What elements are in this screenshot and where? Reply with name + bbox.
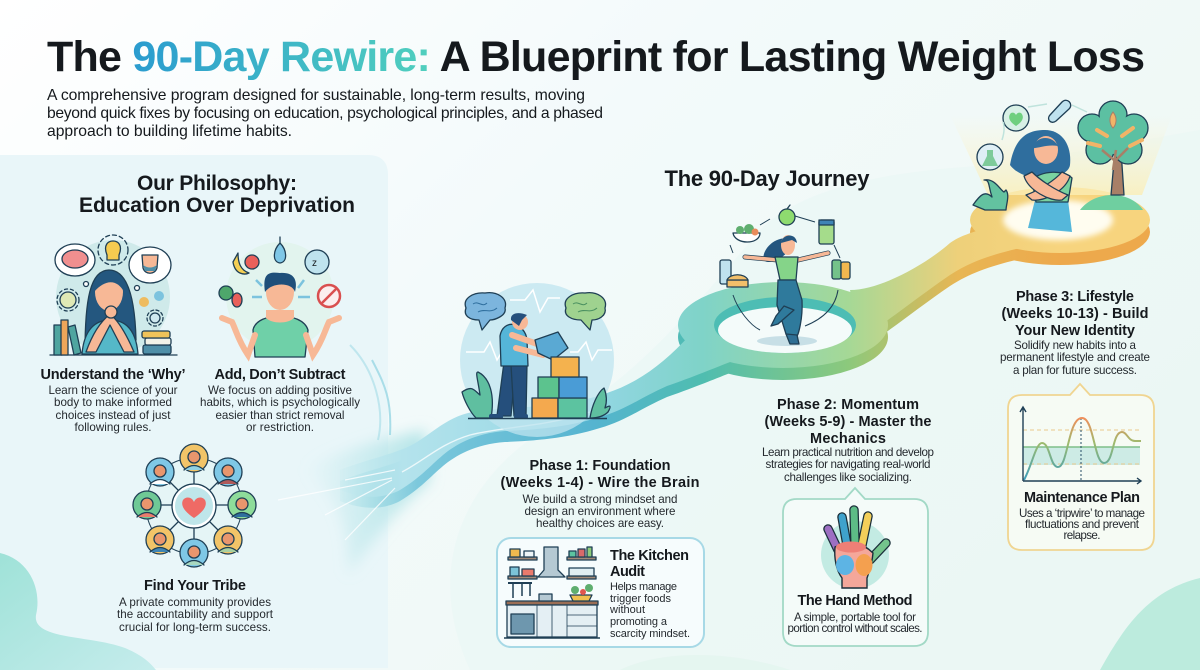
text: add, don't subtract <box>200 367 360 434</box>
card: the kitchen audit: without <box>609 604 645 616</box>
text: understand the why: Understand the ‘Why’ <box>40 367 186 383</box>
card: the kitchen audit <box>497 538 704 647</box>
icon: man balancing healthy habits <box>219 237 340 357</box>
card: the kitchen audit: Audit <box>610 564 645 580</box>
text: find your tribe: A private community provides <box>119 596 271 609</box>
ribbon tail white strands <box>278 470 395 540</box>
text: understand the why: choices instead of just <box>56 409 171 422</box>
text: phase 1: healthy choices are easy. <box>536 517 664 530</box>
text: find your tribe: the accountability and support <box>117 608 274 621</box>
text: phase 1 <box>500 458 700 530</box>
heading: the 90-day journey: The 90-Day Journey <box>664 166 870 191</box>
panel: philosophy background <box>0 155 388 668</box>
icon: colour-coded hand <box>821 510 889 589</box>
card: the kitchen audit: Helps manage <box>610 581 677 593</box>
card: the kitchen audit: trigger foods <box>610 593 672 605</box>
card: the hand method: A simple, portable tool for <box>794 611 916 624</box>
text: phase 1: (Weeks 1-4) - Wire the Brain <box>500 475 700 491</box>
card: the kitchen audit: The Kitchen <box>610 548 689 564</box>
icon: community tribe network <box>133 444 256 567</box>
text: add, don't subtract: Add, Don’t Subtract <box>214 367 346 383</box>
text: phase 2: Phase 2: Momentum <box>777 397 919 413</box>
heading: our philosophy: Our Philosophy: <box>137 172 297 195</box>
illustration: phase 3 woman, tree and icons <box>973 100 1148 232</box>
text: phase 2: challenges like socializing. <box>784 471 912 484</box>
intro text: A comprehensive program designed for sustainable, long-term results, moving <box>47 87 585 104</box>
icon: kitchen <box>504 547 600 638</box>
text: phase 2: (Weeks 5-9) - Master the <box>764 414 932 430</box>
text: phase 3: Phase 3: Lifestyle <box>1016 289 1134 305</box>
intro text: approach to building lifetime habits. <box>47 123 292 140</box>
journey path ribbon top surface <box>340 187 1150 497</box>
text: find your tribe: Find Your Tribe <box>144 578 246 594</box>
icon: woman thinking with brain and books <box>50 235 177 355</box>
text: understand the why: body to make informed <box>54 396 172 409</box>
text: phase 1: Phase 1: Foundation <box>530 458 670 474</box>
text: phase 2 <box>762 397 934 484</box>
text: phase 3 <box>1000 289 1150 377</box>
heading: our philosophy: Education Over Deprivation <box>79 194 355 217</box>
intro text: beyond quick fixes by focusing on education, psychological principles, and a phased <box>47 105 603 122</box>
intro text <box>47 87 603 140</box>
text: phase 3: permanent lifestyle and create <box>1000 351 1150 364</box>
text: find your tribe <box>117 578 274 634</box>
icon: man balancing healthy habits: z <box>312 258 317 269</box>
text: phase 2: Learn practical nutrition and develop <box>762 446 934 459</box>
text: find your tribe: crucial for long-term success. <box>119 621 271 634</box>
text: phase 3: a plan for future success. <box>1013 364 1137 377</box>
illustration: phase 1 man stacking blocks <box>460 283 614 437</box>
journey path ribbon side <box>340 199 1150 508</box>
ring platform hole <box>714 297 856 353</box>
text: understand the why: Learn the science of your <box>48 384 178 397</box>
card: maintenance plan: relapse. <box>1064 529 1100 542</box>
text: understand the why: following rules. <box>74 421 152 434</box>
card: maintenance plan <box>1008 384 1154 550</box>
card: the kitchen audit: scarcity mindset. <box>610 628 690 640</box>
text: phase 1: design an environment where <box>524 505 676 518</box>
text: phase 3: Your New Identity <box>1015 323 1135 339</box>
card: maintenance plan: Uses a ‘tripwire’ to manage <box>1019 507 1145 520</box>
text: add, don't subtract: habits, which is psychologically <box>200 396 360 409</box>
card: the hand method: The Hand Method <box>798 593 912 609</box>
card: the hand method: portion control without scales. <box>788 622 922 635</box>
text: phase 1: We build a strong mindset and <box>522 493 678 506</box>
card: maintenance plan: fluctuations and prevent <box>1025 518 1140 531</box>
text: phase 3: Solidify new habits into a <box>1014 339 1137 352</box>
text: phase 2: strategies for navigating real-world <box>766 458 930 471</box>
card: maintenance plan: Maintenance Plan <box>1024 490 1140 506</box>
text: add, don't subtract: We focus on adding positive <box>208 384 352 397</box>
text: add, don't subtract: easier than strict removal <box>216 409 344 422</box>
top disc glow and light cone <box>950 115 1172 240</box>
illustration: phase 2 woman juggling nutrition <box>720 205 850 344</box>
heading: our philosophy <box>79 172 355 217</box>
text: add, don't subtract: or restriction. <box>246 421 314 434</box>
decorative blob: bottom left <box>0 553 156 670</box>
text: understand the why <box>40 367 186 434</box>
ribbon tail splash <box>300 430 430 575</box>
card: the hand method <box>783 488 928 646</box>
text: phase 2: Mechanics <box>810 431 886 447</box>
title: The 90-Day Rewire: A Blueprint for Lasting Weight Loss <box>47 33 1145 81</box>
card: the kitchen audit: promoting a <box>610 616 668 628</box>
text: phase 3: (Weeks 10-13) - Build <box>1002 306 1148 322</box>
chart: weight fluctuation line chart <box>1020 407 1141 484</box>
